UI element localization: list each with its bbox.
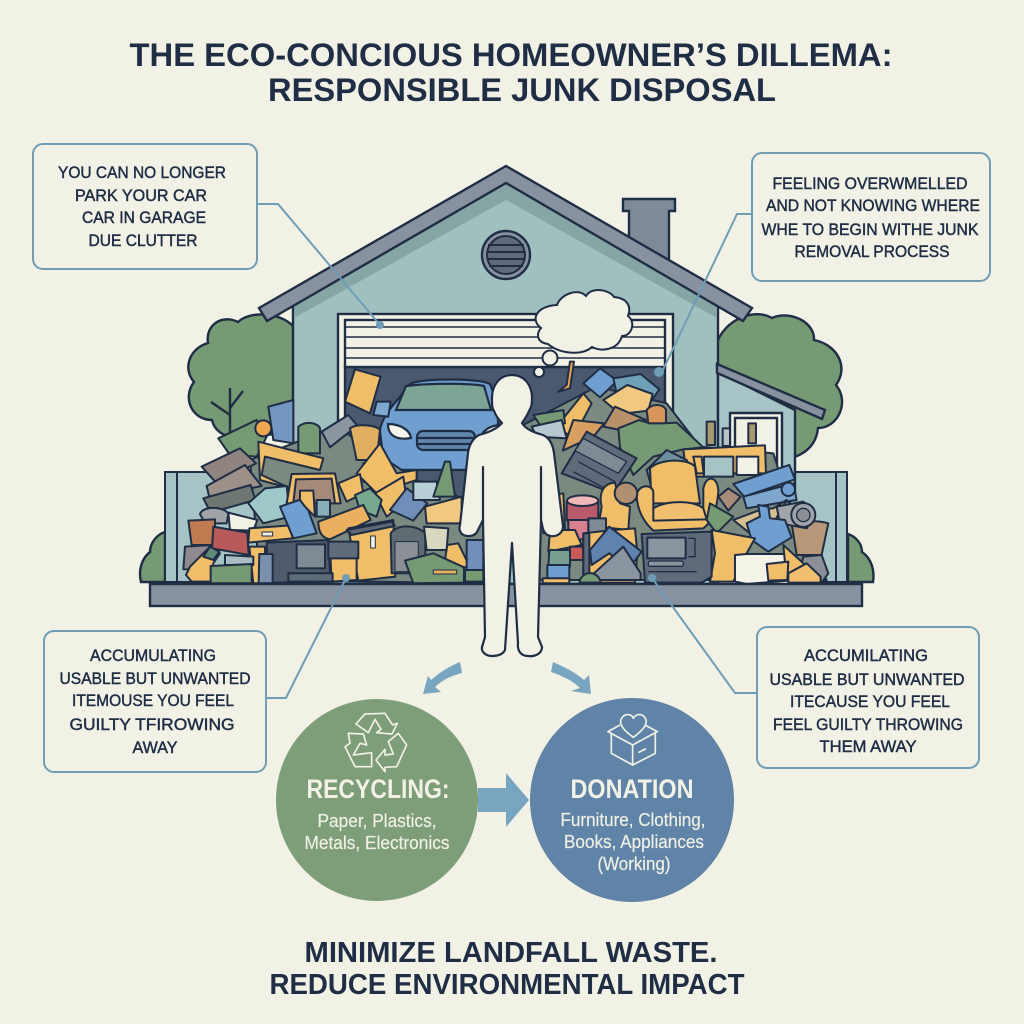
panel: donation: Furniture, Clothing, [560, 810, 706, 830]
garage frame [338, 314, 673, 504]
footer message [270, 937, 745, 1001]
chimney [623, 199, 675, 262]
side extension [717, 364, 825, 500]
callout: overwhelmed: WHE TO BEGIN WITHE JUNK [762, 221, 978, 239]
roof [259, 166, 752, 321]
panel: recycling [276, 699, 478, 901]
panel: donation: (Working) [598, 854, 670, 874]
connector end dots [342, 321, 664, 582]
callout: park your car: CAR IN GARAGE [82, 209, 206, 227]
panel: donation [530, 698, 734, 902]
person silhouette [459, 375, 563, 656]
arrow: to recycling [423, 662, 462, 694]
callout: overwhelmed: REMOVAL PROCESS [794, 243, 950, 261]
callout: accumulating right [757, 627, 979, 768]
callout: park your car: PARK YOUR CAR [75, 187, 207, 205]
arrow: recycling to donation [478, 773, 529, 827]
title: THE ECO-CONCIOUS HOMEOWNER’S DILLEMA: [130, 37, 893, 73]
panel: recycling: Paper, Plastics, [318, 811, 436, 831]
callout: accumulating left: AWAY [132, 739, 178, 757]
illustration: house [259, 166, 825, 584]
callout: accumulating left: USABLE BUT UNWANTED [60, 670, 251, 688]
footer message: MINIMIZE LANDFALL WASTE. [304, 937, 718, 969]
panel: recycling: Metals, Electronics [304, 833, 450, 853]
attic vent [482, 231, 530, 279]
roof shadow [294, 184, 717, 318]
garage interior [345, 367, 665, 503]
house wall [293, 183, 718, 584]
illustration: car [380, 380, 505, 500]
callout: accumulating right: THEM AWAY [820, 738, 916, 756]
callout: overwhelmed [752, 153, 990, 281]
thought bubble [534, 290, 632, 377]
illustration: side fences [165, 472, 847, 582]
callout connector lines [257, 204, 757, 698]
panel: recycling: RECYCLING: [306, 774, 450, 804]
callout: accumulating right: ITECAUSE YOU FEEL [790, 693, 950, 711]
callout: accumulating left: ITEMOUSE YOU FEEL [72, 692, 234, 710]
callout: park your car [33, 144, 257, 269]
callout: accumulating right: ACCUMILATING [804, 647, 928, 665]
callout: overwhelmed: AND NOT KNOWING WHERE [766, 197, 980, 215]
illustration: trees and bushes [140, 314, 874, 582]
panel: donation: DONATION [570, 774, 694, 804]
arrow: to donation [551, 662, 591, 694]
panel: donation: Books, Appliances [564, 832, 704, 852]
title [130, 37, 893, 108]
callout: accumulating left: GUILTY TFIROWING [70, 716, 235, 734]
illustration: junk pile left [183, 369, 483, 583]
title: RESPONSIBLE JUNK DISPOSAL [268, 72, 776, 108]
callout: accumulating left: ACCUMULATING [90, 647, 216, 665]
icon: recycle [345, 713, 407, 772]
garage platform [150, 584, 862, 606]
illustration: junk pile right [520, 362, 828, 584]
callout: accumulating right: USABLE BUT UNWANTED [770, 671, 965, 689]
callout: overwhelmed: FEELING OVERWMELLED [772, 175, 968, 193]
garage door [345, 320, 665, 367]
callout: park your car: DUE CLUTTER [88, 232, 198, 250]
callout: accumulating right: FEEL GUILTY THROWING [773, 716, 963, 734]
footer message: REDUCE ENVIRONMENTAL IMPACT [270, 969, 745, 1001]
callout: accumulating left [44, 631, 266, 772]
callout: park your car: YOU CAN NO LONGER [58, 164, 226, 182]
icon: donation box with heart [608, 715, 657, 765]
